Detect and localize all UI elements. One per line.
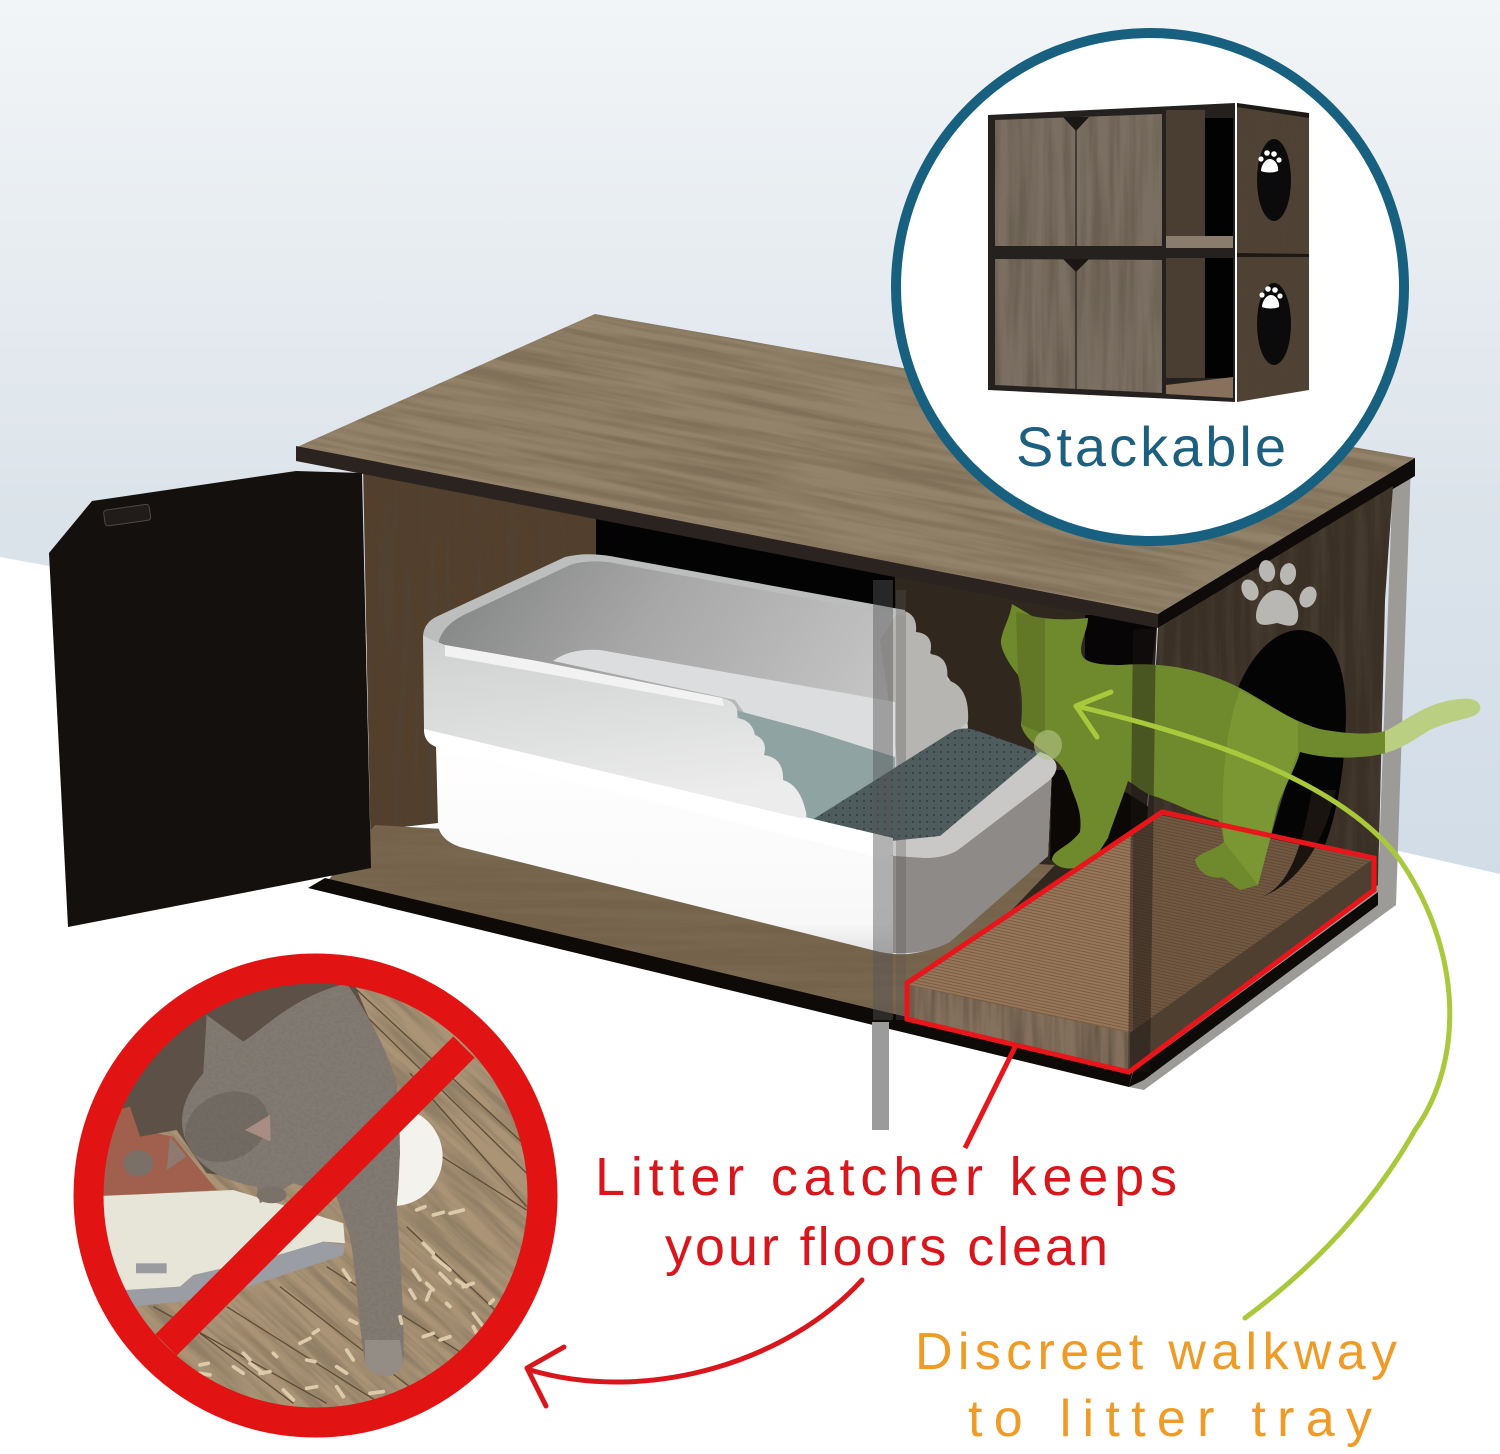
- cat ear right: [245, 1115, 271, 1142]
- cat silhouette: [1001, 604, 1480, 890]
- interior back wall, black section: [596, 505, 905, 860]
- cabinet: [49, 314, 1480, 1130]
- right side panel: [1133, 486, 1393, 1072]
- lower shelf: [1166, 377, 1233, 398]
- green arrow: [1076, 692, 1450, 1318]
- litter box: [423, 554, 1057, 954]
- grey tray base: [125, 1242, 345, 1307]
- icon: paw print: [1238, 559, 1320, 626]
- upper doors: [995, 114, 1162, 246]
- inset: stackable: [896, 33, 1404, 541]
- side grain: [1237, 103, 1309, 402]
- mat: [812, 729, 1040, 847]
- tub side in shade: [893, 767, 1052, 953]
- side divider: [1237, 253, 1309, 257]
- lower doors grain: [995, 259, 1162, 393]
- white floor: [0, 557, 1500, 1454]
- cat back shadow: [103, 982, 400, 1207]
- white tray back: [396, 1114, 443, 1206]
- no-mess prohibition sign: [88, 968, 542, 1422]
- chest highlight: [1034, 730, 1062, 760]
- right compartment back wall: [895, 565, 1158, 1072]
- white tray front: [102, 1190, 345, 1292]
- floor grain: [142, 989, 528, 1408]
- panel body: [1133, 486, 1393, 1072]
- upper shelf: [1166, 236, 1233, 248]
- cat ear left: [167, 1137, 187, 1170]
- inset circle: [896, 33, 1404, 541]
- dark band under side panel: [1129, 892, 1378, 1087]
- arrow curve: [530, 1280, 862, 1382]
- bottom edge strip: [308, 878, 1133, 1087]
- wooden top: [298, 314, 1415, 614]
- interior back wall, wood section: [363, 465, 600, 868]
- head shade: [1016, 612, 1045, 735]
- side panel: [1237, 103, 1309, 402]
- scattered pellets: [200, 1207, 493, 1400]
- back scalloped shield: [880, 610, 968, 780]
- glass column right part: [896, 590, 906, 1020]
- shadow beside cat legs: [1050, 770, 1170, 860]
- red arrow to sign: [527, 1280, 862, 1406]
- interior wood grain: [363, 465, 600, 868]
- hood rim highlight: [445, 645, 724, 706]
- doorway crescent over tray: [1258, 790, 1336, 898]
- translucent side edge: [1129, 462, 1411, 1090]
- arrow head: [1076, 692, 1111, 737]
- tray label: [136, 1263, 167, 1273]
- door panel: [49, 471, 371, 927]
- stacked cabinets: [988, 103, 1309, 402]
- outer back rim: [423, 554, 905, 646]
- upper compartment dark: [1205, 118, 1233, 236]
- wall background: [0, 0, 1500, 900]
- cat: [182, 983, 404, 1376]
- red bar: [166, 1047, 464, 1345]
- tray front face: [907, 985, 1130, 1070]
- mat rim: [880, 752, 1057, 858]
- glass column over box: [873, 580, 893, 1020]
- litter pellets in tray: [104, 1106, 216, 1196]
- inner walls: [432, 557, 968, 800]
- front face grain: [907, 985, 1130, 1070]
- floor grain: [325, 825, 1055, 1019]
- callout: walkway: to litter tray: [968, 1390, 1372, 1448]
- hinge: [103, 504, 151, 526]
- cat doorway: [1221, 630, 1346, 903]
- lower tub: [436, 745, 1052, 954]
- cat front paw: [257, 1187, 287, 1203]
- icon: upper paw: [1258, 150, 1282, 172]
- upper compartment: [1166, 110, 1205, 236]
- floor planks: [153, 987, 527, 1403]
- rim band: [424, 726, 893, 858]
- top right edge: [1158, 458, 1415, 628]
- tray top: [909, 815, 1372, 1033]
- callout: litter catcher: [595, 1147, 1177, 1277]
- upper doors grain: [995, 114, 1162, 246]
- red leader line: [965, 1047, 1015, 1148]
- panel grain: [1133, 486, 1393, 1072]
- arrow head: [527, 1347, 564, 1406]
- door seams: [1075, 118, 1077, 389]
- icon: lower paw: [1259, 286, 1283, 308]
- inner floor: [553, 650, 895, 770]
- side top edge: [1237, 103, 1309, 118]
- cabinet frame: [988, 103, 1235, 402]
- lower compartment: [1166, 258, 1205, 378]
- lower side hole: [1257, 283, 1291, 365]
- cat fur: [186, 1032, 404, 1362]
- litter catcher tray: [907, 815, 1372, 1072]
- callout: walkway: [915, 1323, 1397, 1448]
- door notches: [1063, 117, 1089, 272]
- callout: litter catcher: Litter catcher keeps: [595, 1147, 1177, 1207]
- callout: litter catcher: your floors clean: [665, 1217, 1108, 1277]
- red ring: [88, 968, 542, 1422]
- callout: walkway: Discreet walkway: [915, 1323, 1397, 1381]
- open door: [49, 471, 371, 927]
- tray right face: [1130, 860, 1372, 1072]
- lower doors: [995, 259, 1162, 393]
- shadow behind cat: [1085, 615, 1158, 680]
- cat head shade: [185, 1092, 268, 1162]
- translucent panel post: [1128, 628, 1156, 1072]
- top wood grain: [305, 314, 1414, 612]
- top front edge: [296, 446, 1158, 628]
- photo: [100, 980, 532, 1412]
- stackable label: Stackable: [1016, 415, 1286, 478]
- tray shade under panel: [1133, 815, 1372, 1031]
- lower compartment dark: [1205, 258, 1233, 378]
- upper side hole: [1257, 139, 1291, 221]
- cat left paw: [123, 1150, 153, 1177]
- cat paw light: [365, 1340, 403, 1376]
- door support rod: [872, 1022, 889, 1130]
- arrow curve: [1076, 706, 1450, 1318]
- front hood with scalloped edge: [423, 636, 806, 818]
- doorway seen through cat: [1223, 690, 1298, 885]
- red outline of litter catcher: [907, 812, 1374, 1072]
- interior floor: [325, 825, 1055, 1019]
- litter granules: [735, 710, 895, 824]
